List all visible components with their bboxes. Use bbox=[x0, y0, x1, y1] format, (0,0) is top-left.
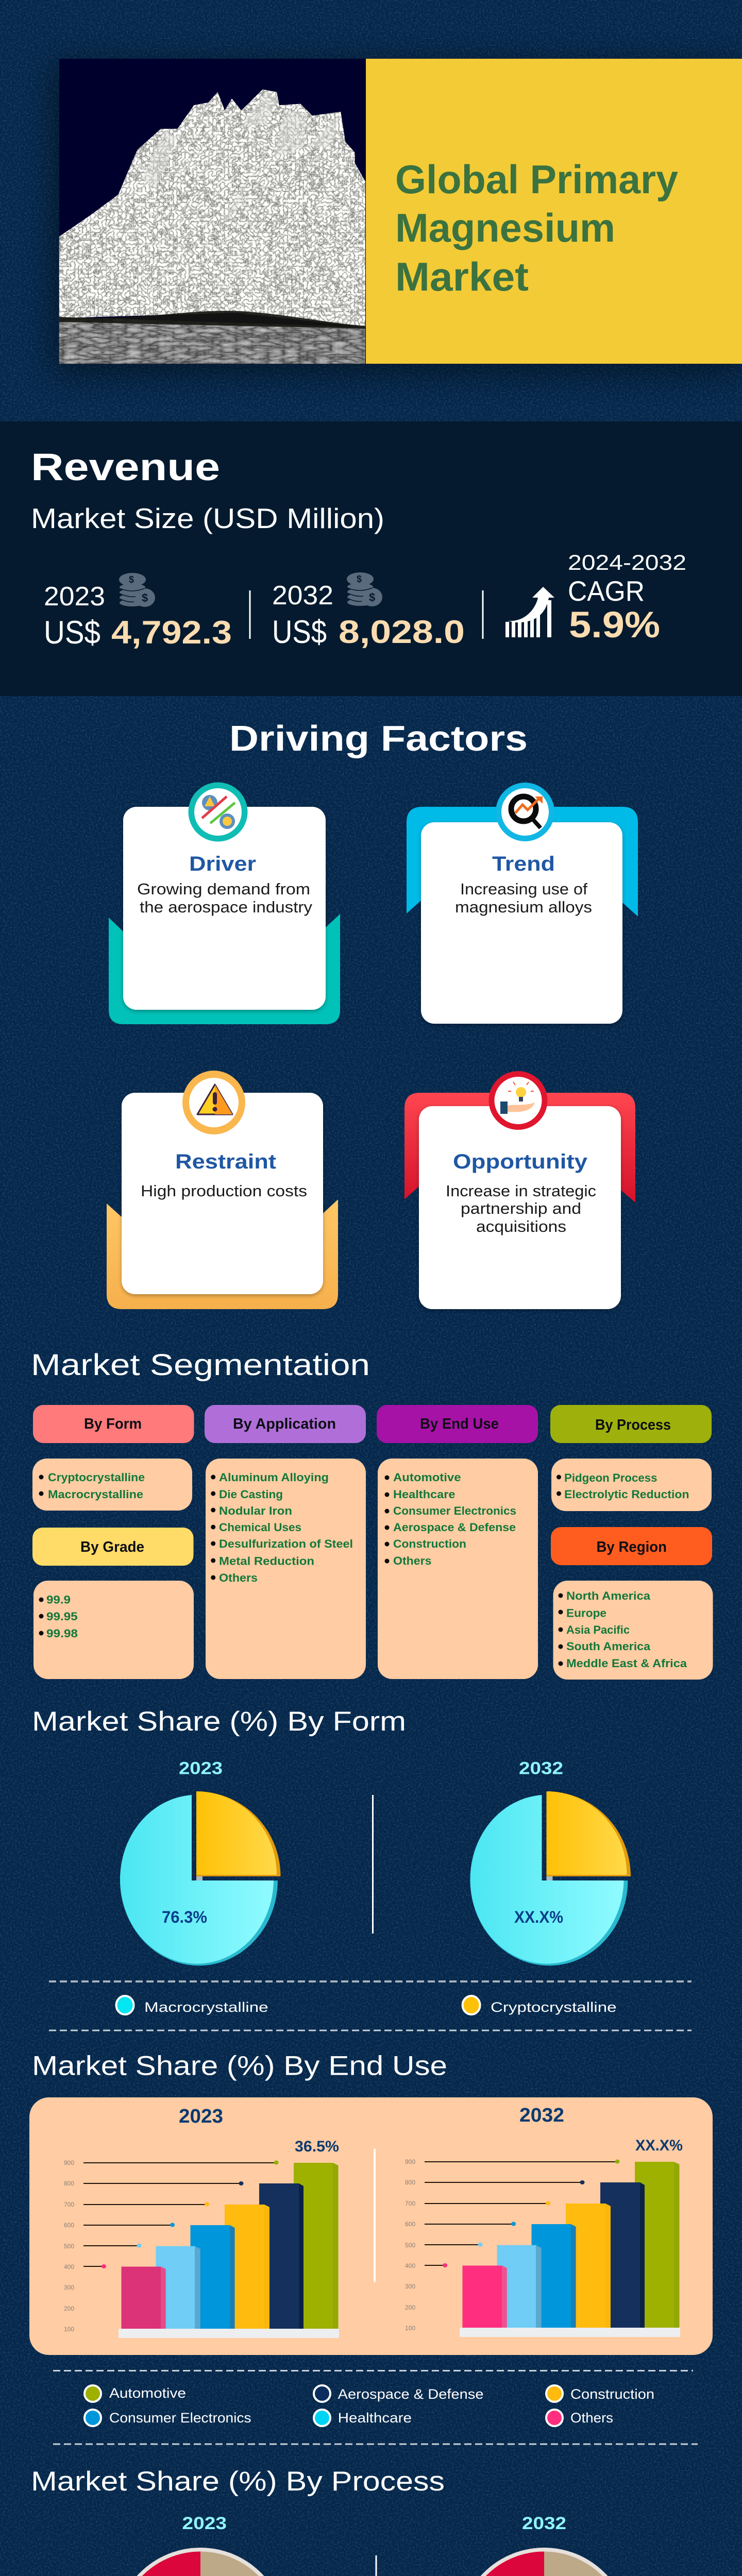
title panel: Market bbox=[395, 254, 529, 299]
icon: growth arrow bbox=[505, 587, 554, 637]
bar chart: 2032 bbox=[405, 2137, 683, 2337]
pie chart: form 2023 bbox=[120, 1791, 281, 1965]
segment: by end use: Others bbox=[393, 1554, 432, 1567]
bar chart: 2023: 500 bbox=[64, 2243, 74, 2250]
segment: by region: Meddle East & Africa bbox=[566, 1657, 687, 1670]
text: opportunity description: partnership and bbox=[461, 1199, 581, 1217]
section: hero and revenue bbox=[0, 0, 742, 696]
title panel: Global Primary bbox=[395, 157, 678, 202]
segment: by end use: Consumer Electronics bbox=[393, 1504, 516, 1517]
divider bbox=[375, 2555, 377, 2576]
stat: 2023: 2023 bbox=[44, 582, 105, 612]
panel: revenue bbox=[0, 421, 742, 696]
divider bbox=[372, 1795, 374, 1934]
bar chart: 2023: 100 bbox=[64, 2326, 74, 2333]
bar chart: 2023: 400 bbox=[64, 2263, 74, 2270]
stat: 2032: $ bbox=[357, 574, 362, 584]
bar chart: 2023: 200 bbox=[64, 2305, 74, 2312]
legend: end use: Others bbox=[570, 2410, 613, 2426]
bar chart: 2023: 800 bbox=[64, 2180, 74, 2187]
section: market share by process bbox=[0, 2452, 742, 2576]
stat: 2023: 4,792.3 bbox=[111, 615, 232, 651]
segment: by end use: Automotive bbox=[393, 1471, 461, 1484]
card: restraint: Restraint bbox=[175, 1150, 276, 1173]
bar chart: 2032: 300 bbox=[405, 2283, 415, 2290]
segment: by end use: By End Use bbox=[420, 1416, 499, 1432]
stat: CAGR: 2024-2032 bbox=[568, 550, 686, 574]
text: trend description: magnesium alloys bbox=[455, 898, 592, 916]
bar chart: 2032: XX.X% bbox=[635, 2137, 683, 2154]
card: restraint bbox=[107, 1071, 338, 1309]
section: market share by form bbox=[0, 1700, 742, 2092]
segment: by application bbox=[205, 1405, 366, 1679]
icon: driver bbox=[189, 782, 247, 842]
text: trend description bbox=[455, 880, 592, 916]
legend: form: Cryptocrystalline bbox=[491, 1999, 616, 2015]
text: opportunity description: acquisitions bbox=[476, 1217, 566, 1235]
bar chart: 2032: 100 bbox=[405, 2325, 415, 2332]
hero photo: magnesium crystal bbox=[59, 59, 366, 364]
divider bbox=[482, 590, 483, 639]
segment: by grade: 99.95 bbox=[46, 1610, 78, 1623]
legend: form: Macrocrystalline bbox=[144, 1999, 268, 2015]
text: driver description: Growing demand from bbox=[137, 880, 310, 898]
bar chart: 2023: 900 bbox=[64, 2159, 74, 2166]
donut chart: process 2023 bbox=[116, 2550, 284, 2576]
stat: CAGR: CAGR bbox=[568, 575, 645, 607]
segment: by process: Electrolytic Reduction bbox=[564, 1488, 689, 1501]
segment: by application: Nodular Iron bbox=[219, 1504, 292, 1517]
year label 2032: 2032 bbox=[519, 1759, 563, 1778]
segment: by grade: By Grade bbox=[80, 1539, 144, 1555]
card: trend bbox=[407, 783, 638, 1024]
heading: market segmentation: Market Segmentation bbox=[31, 1348, 370, 1382]
donut chart: process 2032 bbox=[460, 2550, 629, 2576]
legend: end use: Healthcare bbox=[338, 2410, 412, 2426]
text: opportunity description: Increase in strategic bbox=[446, 1182, 596, 1200]
heading: market share by process: Market Share (%) By Process bbox=[31, 2466, 445, 2497]
text: restraint description: High production costs bbox=[141, 1182, 307, 1200]
stat: 2032: US$ bbox=[272, 614, 327, 650]
section: end use bbox=[0, 2092, 742, 2452]
segment: by application: Others bbox=[219, 1571, 258, 1584]
segment: by region bbox=[551, 1527, 713, 1680]
segment: by application: Desulfurization of Steel bbox=[219, 1537, 353, 1550]
bar chart: 2032: 500 bbox=[405, 2242, 415, 2249]
segment: by end use: Construction bbox=[393, 1537, 466, 1550]
divider bbox=[249, 590, 250, 639]
section: driving factors bbox=[0, 696, 742, 1340]
segment: by end use: Healthcare bbox=[393, 1488, 456, 1501]
segment: by region: South America bbox=[566, 1640, 651, 1653]
icon: opportunity bbox=[488, 1071, 547, 1130]
bar chart: 2032: 800 bbox=[405, 2179, 415, 2186]
bar chart: 2023: 36.5% bbox=[295, 2138, 339, 2155]
segment: by process bbox=[550, 1405, 712, 1511]
text: opportunity description bbox=[446, 1182, 596, 1235]
legend: end use bbox=[85, 2385, 654, 2426]
panel: end use charts bbox=[29, 2097, 713, 2355]
title panel bbox=[366, 59, 742, 364]
card: trend: Trend bbox=[492, 853, 555, 875]
card: driver: Driver bbox=[189, 853, 256, 875]
segment: by grade: 99.98 bbox=[46, 1627, 78, 1640]
segment: by application: By Application bbox=[233, 1416, 336, 1432]
stat: CAGR: 5.9% bbox=[569, 605, 660, 646]
legend: end use: Aerospace & Defense bbox=[338, 2386, 484, 2402]
stat: 2032: 8,028.0 bbox=[339, 614, 465, 650]
stat: 2023: US$ bbox=[44, 615, 100, 651]
title panel: Magnesium bbox=[395, 205, 615, 250]
section: market segmentation bbox=[0, 1340, 742, 1700]
heading: driving factors: Driving Factors bbox=[229, 718, 528, 758]
segment: by end use bbox=[377, 1405, 538, 1679]
icon: trend bbox=[496, 783, 554, 841]
segment: by form: Cryptocrystalline bbox=[48, 1471, 145, 1484]
bar chart: 2032: 600 bbox=[405, 2221, 415, 2228]
heading: revenue: Revenue bbox=[31, 446, 220, 488]
stat: 2032: 2032 bbox=[272, 581, 333, 611]
segment: by grade: 99.9 bbox=[46, 1593, 71, 1606]
segment: by process: Pidgeon Process bbox=[564, 1471, 657, 1484]
legend: form bbox=[116, 1996, 616, 2015]
segment: by region: North America bbox=[566, 1589, 651, 1602]
stat: 2032 bbox=[272, 572, 465, 650]
bar chart: 2032: 700 bbox=[405, 2200, 415, 2207]
bar chart: 2032: 400 bbox=[405, 2262, 415, 2269]
panel: end use charts: 2023 bbox=[179, 2106, 223, 2127]
segment: by process: By Process bbox=[595, 1417, 671, 1433]
segment: by grade bbox=[32, 1528, 194, 1679]
bar chart: 2023: 600 bbox=[64, 2222, 74, 2229]
stat: 2032: $ bbox=[369, 591, 375, 604]
segment: by form bbox=[32, 1405, 194, 1511]
segment: by region: Asia Pacific bbox=[566, 1623, 630, 1636]
card: opportunity bbox=[404, 1071, 635, 1309]
text: trend description: Increasing use of bbox=[460, 880, 587, 898]
segment: by application: Chemical Uses bbox=[219, 1521, 301, 1534]
year label 2032: 2032 bbox=[522, 2514, 566, 2533]
segment: by application: Aluminum Alloying bbox=[219, 1471, 329, 1484]
bar chart: 2032: 200 bbox=[405, 2304, 415, 2311]
segment: by form: By Form bbox=[84, 1416, 142, 1432]
segment: by application: Die Casting bbox=[219, 1488, 283, 1501]
stat: 2023 bbox=[44, 573, 232, 651]
panel: end use charts: 2032 bbox=[519, 2105, 564, 2126]
segment: by application: Metal Reduction bbox=[219, 1555, 314, 1567]
legend: end use: Consumer Electronics bbox=[109, 2410, 251, 2426]
hero banner bbox=[54, 59, 742, 374]
bar chart: 2023 bbox=[64, 2138, 339, 2338]
stat: CAGR bbox=[568, 550, 686, 646]
heading: market share by form: Market Share (%) By Form bbox=[32, 1706, 406, 1737]
icon: restraint bbox=[182, 1071, 245, 1134]
pie chart: form 2032: XX.X% bbox=[514, 1908, 563, 1926]
bar chart: 2032: 900 bbox=[405, 2158, 415, 2165]
year label 2023: 2023 bbox=[179, 1759, 223, 1778]
stat: 2023: $ bbox=[142, 591, 148, 604]
legend: end use: Construction bbox=[570, 2386, 654, 2402]
text: driver description bbox=[137, 880, 313, 916]
pie chart: form 2023: 76.3% bbox=[162, 1908, 207, 1926]
subheading: market size: Market Size (USD Million) bbox=[31, 502, 384, 534]
stat: 2023: $ bbox=[129, 574, 134, 585]
card: driver bbox=[109, 782, 340, 1024]
segment: by form: Macrocrystalline bbox=[48, 1488, 143, 1501]
segment: by end use: Aerospace & Defense bbox=[393, 1521, 516, 1534]
heading: market share by end use: Market Share (%) By End Use bbox=[32, 2050, 447, 2081]
year label 2023: 2023 bbox=[182, 2514, 227, 2533]
segment: by region: Europe bbox=[566, 1607, 606, 1620]
pie chart: form 2032 bbox=[470, 1791, 631, 1965]
card: opportunity: Opportunity bbox=[453, 1150, 588, 1173]
divider bbox=[374, 2148, 376, 2282]
bar chart: 2023: 700 bbox=[64, 2201, 74, 2208]
bar chart: 2023: 300 bbox=[64, 2284, 74, 2291]
text: driver description: the aerospace industry bbox=[140, 898, 313, 916]
legend: end use: Automotive bbox=[109, 2385, 186, 2401]
segment: by region: By Region bbox=[597, 1539, 667, 1555]
